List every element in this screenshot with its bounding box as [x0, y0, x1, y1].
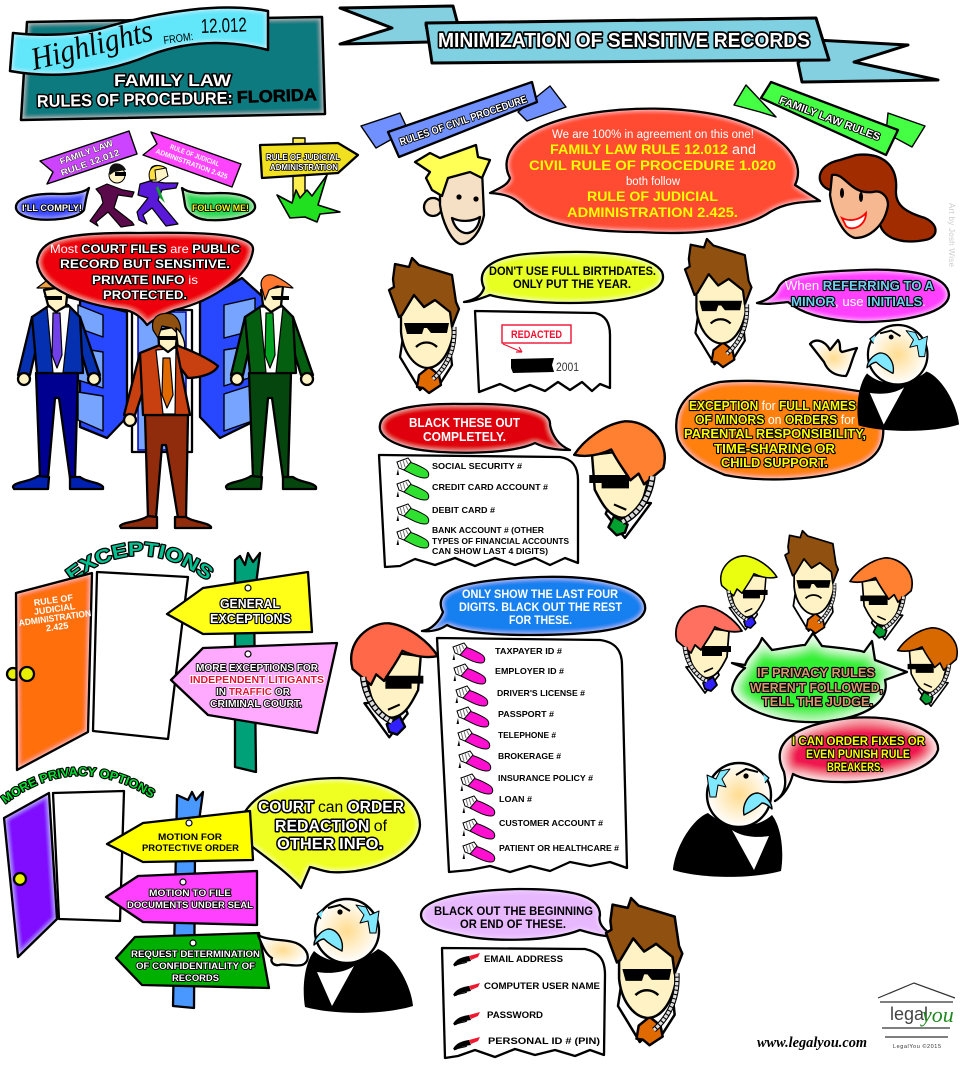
list: black out completely	[379, 455, 578, 567]
bubble: follow me: FOLLOW ME!	[192, 203, 249, 213]
credit: art by: Art by Josh Wise	[947, 203, 956, 268]
head: yellow hair	[721, 556, 777, 630]
head: orange hair	[850, 558, 912, 640]
header: highlights banner	[10, 8, 325, 120]
purple banner: family law rule	[40, 131, 137, 184]
sign: general exceptions: GENERAL	[220, 597, 280, 611]
list items: PATIENT OR HEALTHCARE #	[499, 843, 619, 853]
arc heading: more privacy options: MORE PRIVACY OPTIONS	[0, 766, 156, 805]
list items: PERSONAL ID # (PIN)	[488, 1036, 600, 1046]
bubble: court files are public	[37, 233, 253, 325]
woman's face	[820, 155, 936, 241]
light blue ribbon	[10, 8, 268, 75]
list items: BANK ACCOUNT # (OTHER	[432, 525, 544, 535]
signpost: privacy options	[106, 792, 269, 1008]
sign: more exceptions: CRIMINAL COURT.	[210, 699, 302, 710]
man in orange suit on phone	[120, 313, 218, 528]
signpost: exceptions	[167, 553, 337, 772]
purple door	[4, 793, 57, 957]
purple banner: family law rule: RULE 12.012	[59, 147, 121, 178]
bubble: court can order redaction: COURT can ORDER	[258, 799, 404, 816]
head: red-orange hair	[351, 623, 438, 737]
sign: confidentiality: REQUEST DETERMINATION	[131, 949, 260, 960]
group of five heads	[676, 531, 957, 706]
year: 2001	[556, 362, 579, 374]
orange door	[15, 573, 93, 770]
bubble: birthdates	[464, 252, 663, 303]
orange door: ADMINISTRATION	[18, 608, 92, 628]
list items: BROKERAGE #	[498, 751, 561, 761]
list items: CUSTOMER ACCOUNT #	[499, 818, 603, 828]
blacked out date	[511, 358, 554, 373]
list items: TELEPHONE #	[498, 730, 556, 740]
bubble: 100% agreement: CIVIL RULE OF PROCEDURE 1.020	[529, 158, 776, 173]
orange door: JUDICIAL	[33, 601, 76, 617]
list items: EMAIL ADDRESS	[484, 954, 563, 964]
signpost: rule of judicial administration	[260, 138, 358, 222]
list items: LOAN #	[499, 794, 532, 804]
door knob behind	[7, 668, 19, 680]
ribbon: rules of civil procedure: RULES OF CIVIL PROCEDURE	[398, 93, 529, 148]
paper: redacted example	[475, 311, 610, 392]
sign: general exceptions	[167, 572, 312, 634]
judge with raised hand	[810, 325, 959, 431]
bubble: 100% agreement: We are 100% in agreement on this one!	[552, 129, 754, 141]
sign: confidentiality: OF CONFIDENTIALITY OF	[136, 961, 255, 972]
signpost: rule of judicial administration: RULE OF JUDICIAL	[266, 152, 340, 162]
sign: under seal: MOTION TO FILE	[149, 888, 231, 899]
list items: SOCIAL SECURITY #	[432, 461, 522, 471]
bubble: exception for full names: TIME-SHARING OR	[714, 442, 835, 456]
bubble: beginning or end	[421, 889, 616, 940]
bubble: court can order redaction: REDACTION of	[275, 818, 388, 835]
sign: general exceptions: EXCEPTIONS	[210, 612, 291, 626]
list items: PASSWORD	[487, 1010, 544, 1020]
bubble: court files are public: PRIVATE INFO is	[92, 273, 198, 287]
bubble: order fixes: I CAN ORDER FIXES OR	[792, 736, 926, 748]
pink banner: rule of judicial administration	[143, 132, 241, 187]
bubble: referring to a minor: MINOR, use INITIALS.	[791, 294, 926, 309]
sign: under seal	[106, 871, 257, 925]
bubble: birthdates: DON'T USE FULL BIRTHDATES.	[489, 266, 656, 278]
bubble: tell the judge	[732, 633, 907, 722]
bubble: exception for full names: PARENTAL RESPONSIBILITY,	[684, 427, 866, 441]
bubble: beginning or end: BLACK OUT THE BEGINNING	[434, 906, 593, 918]
sign: more exceptions	[171, 643, 337, 733]
heading: rules of procedure: RULES OF PROCEDURE:	[37, 89, 233, 111]
head: coral hair	[676, 606, 742, 693]
bubble: only show last four: DIGITS. BLACK OUT THE REST	[459, 600, 623, 614]
heading: florida: FLORIDA	[236, 85, 317, 107]
bubble: court files are public: RECORD BUT SENSITIVE.	[60, 257, 230, 271]
rule number: 12.012	[200, 14, 247, 38]
list items: DRIVER'S LICENSE #	[497, 688, 585, 698]
bubble: black these out	[380, 404, 570, 453]
open door frame	[93, 572, 188, 739]
logo: legalyou: legal	[890, 1004, 928, 1024]
bubble: black these out: BLACK THESE OUT	[409, 415, 520, 430]
list: beginning or end	[442, 948, 605, 1058]
sign: more exceptions: INDEPENDENT LITIGANTS	[190, 674, 324, 686]
sign: protective order: PROTECTIVE ORDER	[142, 843, 239, 854]
privacy options door section	[0, 766, 156, 958]
list items: INSURANCE POLICY #	[498, 773, 593, 783]
sign: protective order	[107, 811, 253, 862]
list items: TYPES OF FINANCIAL ACCOUNTS	[432, 536, 569, 546]
bubble: I'll comply	[16, 188, 89, 220]
website url: www.legalyou.com	[757, 1035, 867, 1051]
bubble: referring to a minor	[757, 270, 949, 322]
figure: woman in purple suit leading	[137, 165, 178, 226]
man in blue suit	[13, 278, 103, 489]
bubble: 100% agreement	[490, 109, 820, 233]
teal panel	[21, 17, 325, 120]
bubble: only show last four	[422, 577, 645, 635]
orange door: RULE OF	[33, 592, 74, 608]
bubble: exception for full names: EXCEPTION for FULL NAMES	[689, 399, 856, 413]
open door frame	[53, 791, 124, 921]
list items	[484, 954, 600, 1046]
logo: legalyou: you	[920, 1002, 954, 1027]
bubble: 100% agreement: ADMINISTRATION 2.425.	[567, 205, 738, 220]
bubble: 100% agreement: both follow	[626, 176, 681, 188]
bubble: only show last four: ONLY SHOW THE LAST FOUR	[462, 587, 618, 601]
judge looking up	[673, 763, 782, 877]
bubble: only show last four: FOR THESE.	[509, 613, 572, 627]
ribbon: rules of civil procedure	[361, 82, 566, 157]
magenta brush bullets	[452, 643, 495, 862]
redacted stamp: REDACTED	[511, 329, 562, 341]
list items: CREDIT CARD ACCOUNT #	[432, 482, 548, 492]
bubble: referring to a minor: When REFERRING TO A	[785, 278, 935, 293]
bubble: 100% agreement: FAMILY LAW RULE 12.012 and	[550, 142, 756, 157]
list items: EMPLOYER ID #	[495, 666, 564, 676]
list items: TAXPAYER ID #	[495, 646, 562, 656]
green brush bullets	[396, 458, 429, 548]
title banner	[340, 6, 938, 82]
centre cabinet	[132, 310, 192, 452]
bubble: order fixes	[775, 717, 938, 801]
bubble: tell the judge: TELL THE JUDGE.	[762, 695, 873, 709]
bubble: tell the judge: IF PRIVACY RULES	[757, 666, 875, 680]
exceptions door section	[6, 541, 214, 772]
judge pointing	[258, 899, 413, 1013]
script heading: Highlights: Highlights	[26, 12, 156, 77]
head: dark orange hair	[898, 628, 957, 706]
title text: MINIMIZATION OF SENSITIVE RECORDS	[438, 30, 810, 52]
bubble: birthdates: ONLY PUT THE YEAR.	[513, 279, 631, 291]
boy's face	[415, 145, 490, 244]
sign: confidentiality	[116, 933, 269, 988]
sign: under seal: DOCUMENTS UNDER SEAL	[127, 900, 253, 911]
list items: PASSPORT #	[498, 709, 554, 719]
arc heading: exceptions: EXCEPTIONS	[64, 541, 214, 580]
file cabinets	[68, 278, 263, 452]
marker bullets	[453, 953, 480, 1050]
sign: more exceptions: IN TRAFFIC OR	[216, 687, 291, 698]
list items: DEBIT CARD #	[432, 505, 495, 515]
bubble: order fixes: EVEN PUNISH RULE	[806, 749, 910, 761]
sign: more exceptions: MORE EXCEPTIONS FOR	[196, 663, 319, 674]
bubble: court files are public: PROTECTED.	[103, 288, 187, 302]
man in green suit	[226, 275, 316, 489]
head: brown hair centre	[785, 531, 838, 633]
head: orange hair facing left	[574, 421, 665, 538]
label: from: FROM:	[163, 31, 194, 47]
head: brown hair, birthdates	[389, 258, 459, 393]
purple banner: family law rule: FAMILY LAW	[58, 138, 115, 167]
signpost: rule of judicial administration: ADMINISTRATION	[270, 162, 338, 172]
bubble: exception for full names: OF MINORS on ORDERS for	[695, 413, 855, 427]
bubble: court can order redaction: OTHER INFO.	[277, 836, 383, 853]
bubble: order fixes: BREAKERS.	[827, 762, 883, 774]
ribbon: family law rules: FAMILY LAW RULES	[777, 94, 882, 143]
bubble: beginning or end: OR END OF THESE.	[460, 919, 566, 931]
bubble: exception for full names: CHILD SUPPORT.	[721, 456, 828, 470]
bubble: 100% agreement: RULE OF JUDICIAL	[587, 189, 718, 204]
bubble: court files are public: Most COURT FILES are PUBLIC	[50, 242, 240, 256]
list items: CAN SHOW LAST 4 DIGITS)	[432, 546, 548, 556]
bubble: follow me	[182, 188, 255, 220]
heading: family law: FAMILY LAW	[114, 71, 232, 90]
sign: confidentiality: RECORDS	[172, 973, 219, 984]
list: last four digits	[437, 638, 627, 872]
pink banner: rule of judicial administration: RULE OF JUDICIAL	[169, 144, 221, 168]
bubble: court can order redaction	[242, 778, 420, 888]
bubble: black these out: COMPLETELY.	[423, 429, 506, 444]
head: brown hair, bottom	[606, 898, 682, 1045]
sign: protective order: MOTION FOR	[158, 832, 222, 843]
list items: COMPUTER USER NAME	[484, 981, 600, 991]
orange door: 2.425	[45, 620, 69, 633]
list items	[432, 461, 569, 556]
left cabinet	[68, 297, 127, 438]
head: brown hair, minors	[685, 239, 752, 367]
bubble: I'll comply: I'LL COMPLY!	[22, 203, 82, 213]
logo: legalyou: LegalYou ©2015	[893, 1043, 941, 1050]
figure: man in purple suit walking	[90, 163, 134, 227]
pink banner: rule of judicial administration: ADMINISTRATION 2.425	[154, 148, 228, 181]
right cabinet	[200, 278, 263, 438]
bubble: exception for full names	[676, 381, 883, 479]
list items	[495, 646, 619, 853]
ribbon: family law rules	[734, 82, 925, 155]
logo: legalyou	[878, 983, 955, 1050]
bubble: tell the judge: WEREN'T FOLLOWED,	[750, 681, 883, 695]
